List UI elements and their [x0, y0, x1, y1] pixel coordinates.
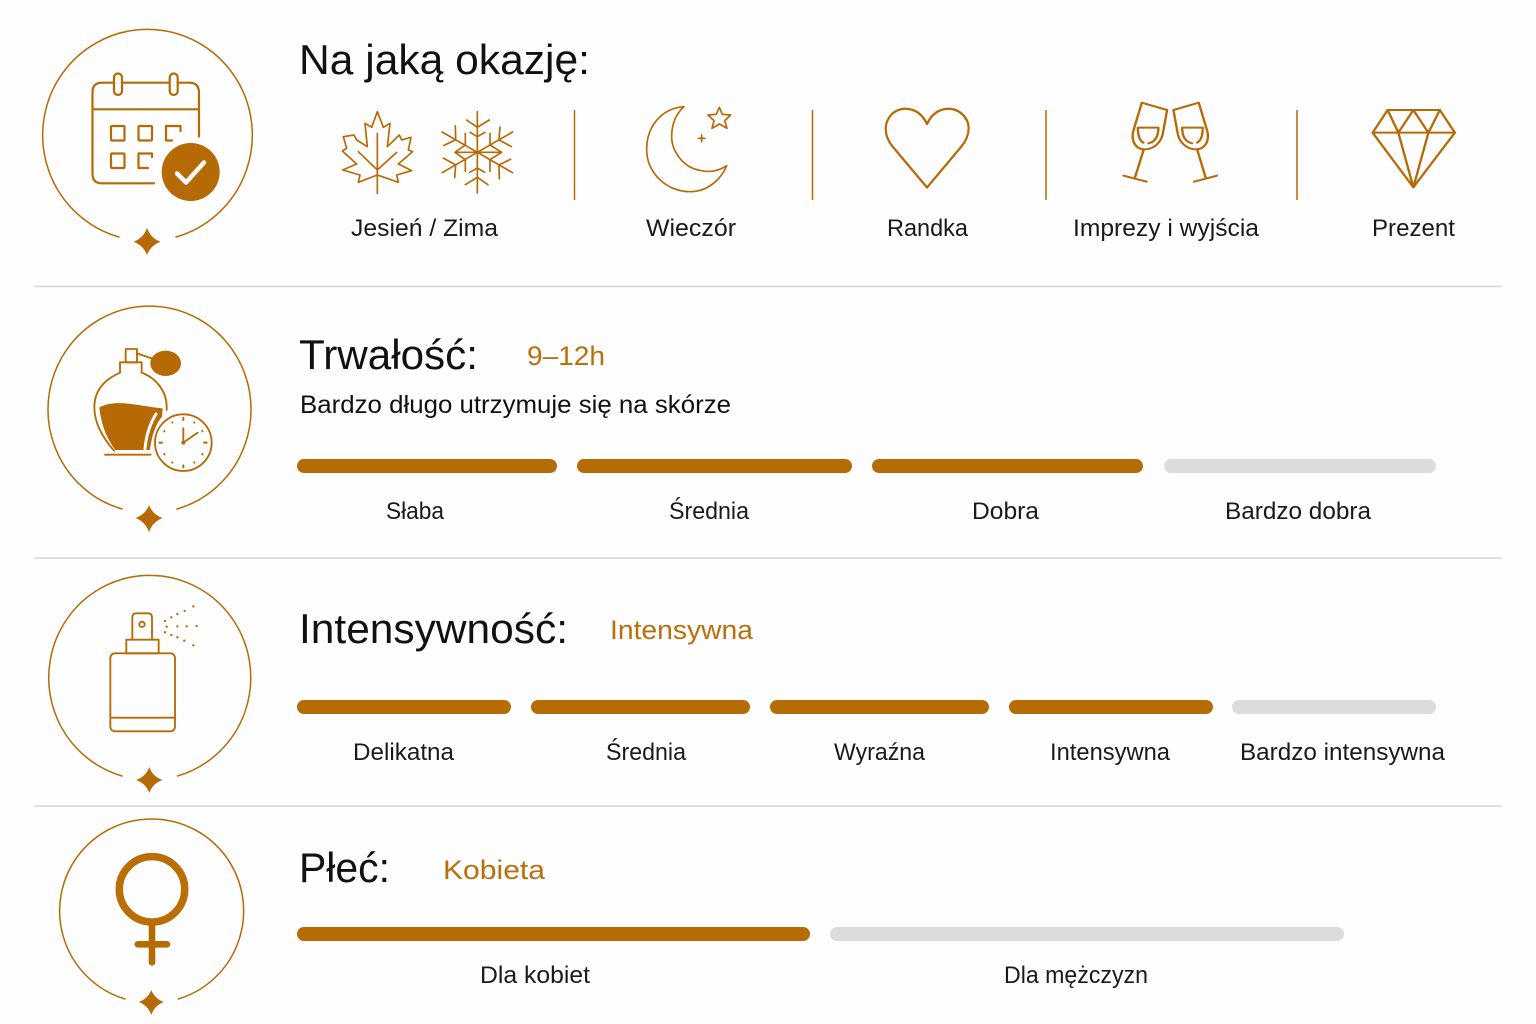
label: weak: Słaba	[386, 498, 445, 525]
icon: diamond	[1373, 110, 1455, 187]
label: medium: Średnia	[669, 497, 750, 525]
label: evening: Wieczór	[646, 215, 736, 242]
label: good: Dobra	[972, 498, 1040, 525]
bar scale: intensity	[297, 700, 1436, 714]
icon: maple leaf	[342, 112, 413, 193]
divider	[1296, 110, 1298, 200]
label: date: Randka	[887, 215, 969, 242]
label: for women: Dla kobiet	[480, 962, 590, 989]
bar scale: gender	[297, 927, 1344, 941]
panel: occasion	[43, 29, 1455, 255]
label: distinct: Wyraźna	[834, 739, 926, 766]
icon: heart	[886, 109, 969, 188]
heading: intensity: Intensywność:	[299, 605, 568, 652]
label: very intense: Bardzo intensywna	[1240, 739, 1446, 766]
label: for men: Dla mężczyzn	[1004, 962, 1148, 989]
icon: crescent moon with star	[647, 107, 731, 192]
divider	[574, 110, 576, 200]
icon: female symbol	[60, 819, 244, 1015]
label: parties: Imprezy i wyjścia	[1073, 215, 1260, 242]
bar scale: longevity	[297, 459, 1436, 473]
divider	[1045, 110, 1047, 200]
icon: snowflake	[436, 112, 519, 193]
icon: perfume bottle and clock	[48, 306, 251, 532]
label: medium: Średnia	[606, 738, 687, 766]
icon: spray bottle	[49, 575, 251, 793]
value: hours: 9–12h	[527, 341, 605, 371]
divider	[812, 110, 814, 200]
heading: longevity: Trwałość:	[299, 331, 478, 378]
heading: occasion: Na jaką okazję:	[299, 36, 590, 83]
panel: longevity	[48, 306, 1436, 532]
label: very good: Bardzo dobra	[1225, 498, 1372, 525]
icon: champagne glasses	[1124, 103, 1217, 182]
label: delicate: Delikatna	[353, 739, 455, 766]
label: intense: Intensywna	[1050, 739, 1171, 766]
value: gender: Kobieta	[443, 855, 546, 885]
panel: intensity	[49, 575, 1446, 793]
description: Bardzo długo utrzymuje się na skórze	[300, 391, 731, 419]
label: autumn winter: Jesień / Zima	[351, 215, 499, 242]
value: intensity: Intensywna	[610, 615, 754, 645]
panel: gender	[60, 819, 1344, 1015]
label: gift: Prezent	[1372, 215, 1455, 242]
heading: gender: Płeć:	[299, 844, 390, 891]
icon: calendar badge	[43, 29, 252, 255]
